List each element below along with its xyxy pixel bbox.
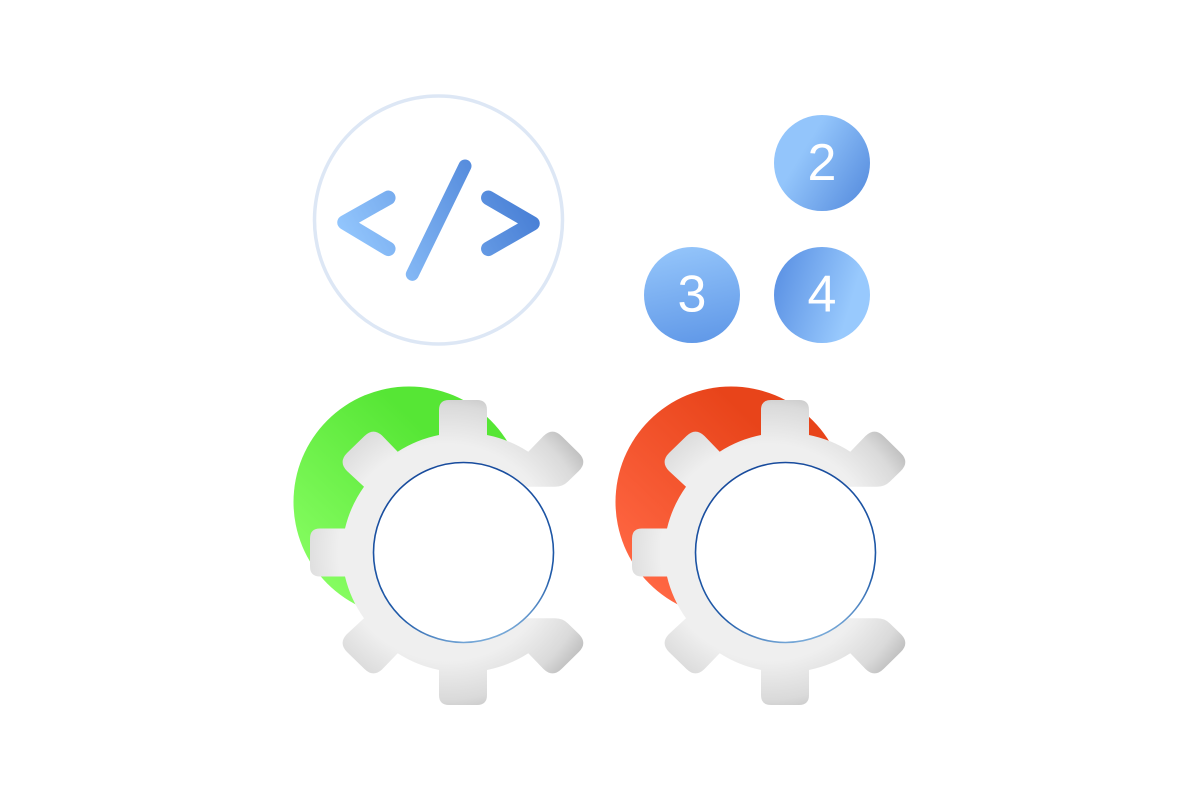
number badge 3: 3 [678, 266, 706, 324]
green circle [294, 386, 524, 618]
right chevron [488, 198, 532, 249]
outline circle [314, 96, 562, 344]
number badge 2: 2 [808, 134, 836, 192]
number badge 4: 4 [808, 266, 836, 324]
gear [632, 400, 905, 705]
number badge 3 [644, 247, 740, 343]
red circle [616, 386, 846, 618]
slash [412, 166, 465, 274]
number badge 4 [774, 247, 870, 343]
number badge 2 [774, 115, 870, 211]
icon: code brackets in circle [314, 96, 562, 344]
green gear group [294, 386, 583, 705]
red gear group [616, 386, 905, 705]
left chevron [344, 198, 388, 249]
gear [310, 400, 583, 705]
